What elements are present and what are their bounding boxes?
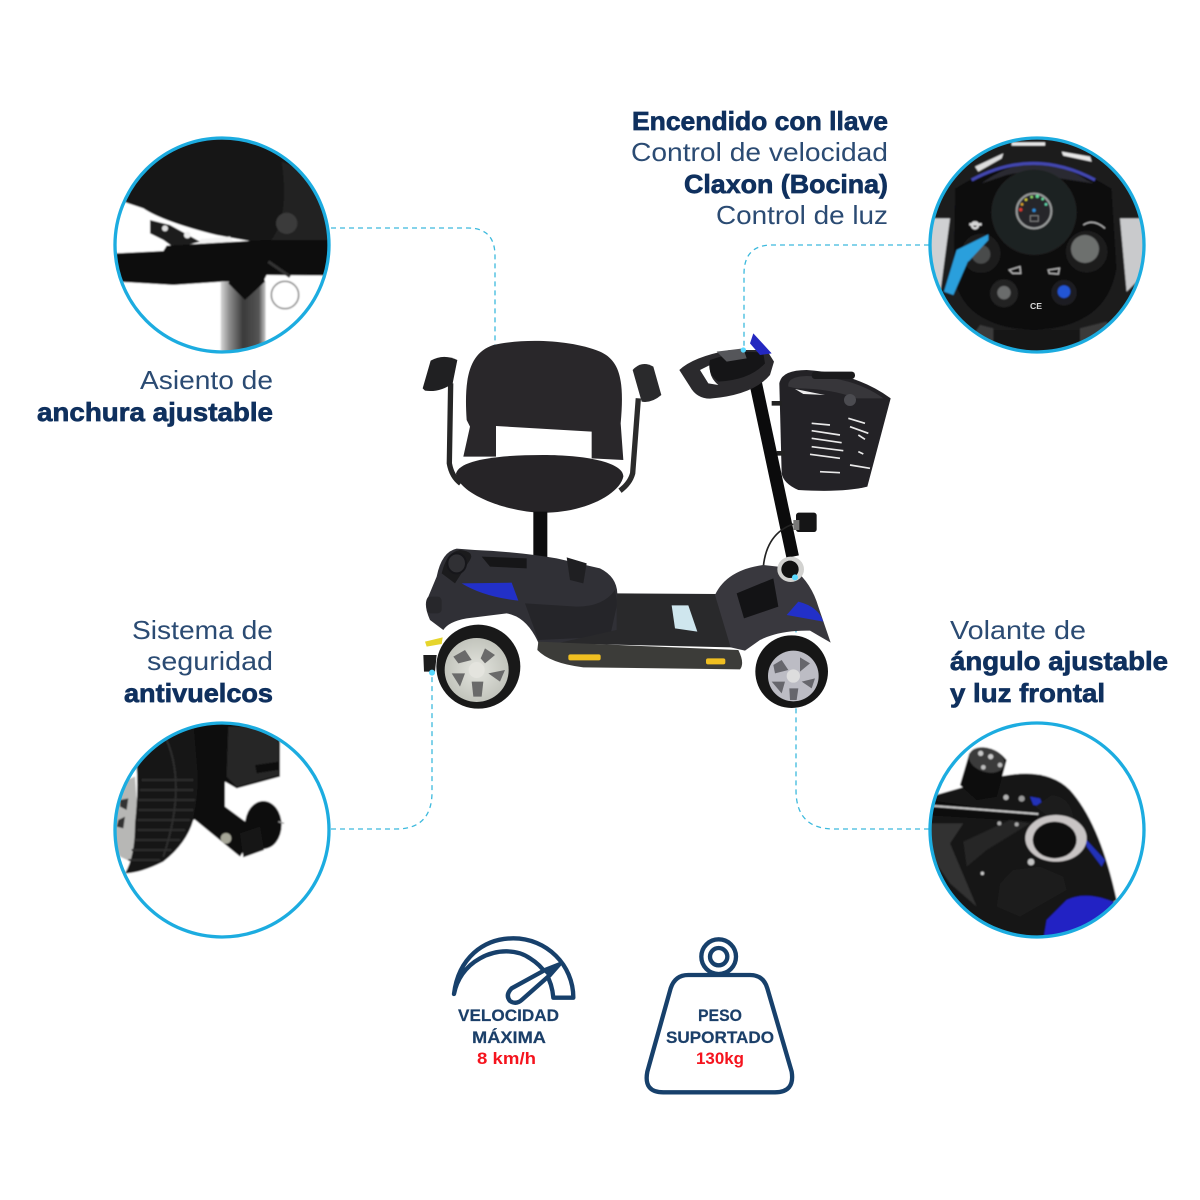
- side sill with reflectors: [537, 642, 742, 669]
- text: max speed: MÁXIMA: [472, 1028, 546, 1047]
- armrests and frame: [423, 357, 661, 491]
- text: seat width: Asiento de: [140, 365, 273, 395]
- text: anti-tip system: seguridad: [147, 646, 273, 676]
- icon: speedometer: [454, 938, 573, 1003]
- connector: anti-tip callout: [331, 672, 432, 829]
- text: seat width: [37, 365, 273, 427]
- text: supported weight: [666, 1006, 774, 1068]
- text: anti-tip system: [124, 615, 273, 708]
- text: max speed: VELOCIDAD: [458, 1006, 559, 1025]
- text: max speed: [458, 1006, 559, 1068]
- footboard: [557, 593, 732, 647]
- text: supported weight: SUPORTADO: [666, 1028, 774, 1047]
- rear body: [426, 549, 625, 643]
- text: controls list: Control de velocidad: [631, 137, 888, 167]
- text: controls list: Control de luz: [716, 200, 888, 230]
- front shroud: [715, 565, 831, 651]
- seat back: [463, 341, 623, 460]
- footboard label: [672, 605, 697, 632]
- steering knob: [777, 557, 804, 582]
- text: supported weight: 130kg: [696, 1049, 744, 1068]
- front wheel: [755, 635, 828, 708]
- rear body details: [427, 550, 617, 640]
- connector: seat callout: [331, 228, 495, 345]
- text: controls list: Encendido con llave: [632, 106, 888, 136]
- photo circle: steering knob and front light: [928, 721, 1146, 939]
- text: seat width: anchura ajustable: [37, 397, 273, 427]
- connector: steering callout: [796, 575, 929, 829]
- connector: controls callout: [744, 245, 929, 350]
- rear wheel: [423, 625, 520, 709]
- seat post: [533, 512, 547, 568]
- text: supported weight: PESO: [698, 1006, 742, 1025]
- photo circle: seat adjuster: [113, 136, 331, 354]
- mobility scooter photo: [423, 333, 891, 709]
- photo circle: control panel: CE: [1030, 301, 1042, 311]
- seat cushion: [456, 455, 623, 513]
- icon: weight: [647, 939, 792, 1092]
- text: steering wheel: y luz frontal: [950, 678, 1105, 708]
- steering column: [755, 380, 817, 567]
- text: anti-tip system: Sistema de: [132, 615, 273, 645]
- text: steering wheel: Volante de: [950, 615, 1086, 645]
- photo circle: control panel: [928, 136, 1146, 354]
- text: controls list: Claxon (Bocina): [684, 169, 888, 199]
- photo circle: anti-tip wheel: [113, 721, 331, 939]
- text: max speed: 8 km/h: [477, 1049, 536, 1068]
- text: controls list: [631, 106, 888, 230]
- text: anti-tip system: antivuelcos: [124, 678, 273, 708]
- tiller handle: [679, 333, 774, 399]
- text: steering wheel: [950, 615, 1168, 708]
- text: steering wheel: ángulo ajustable: [950, 646, 1168, 676]
- basket: [772, 370, 891, 491]
